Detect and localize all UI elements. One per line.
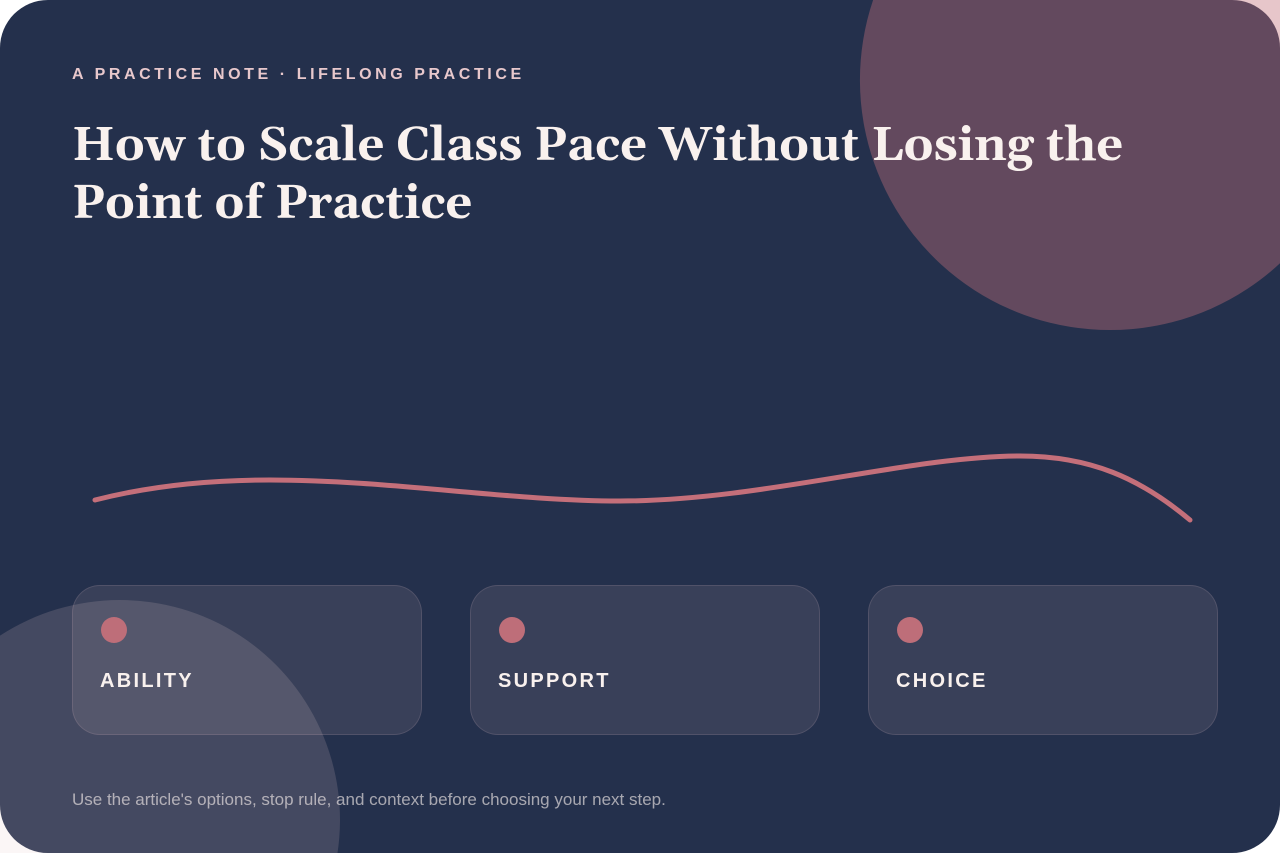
label: ability: ABILITY — [100, 670, 194, 692]
decorative circle: bottom left — [0, 600, 340, 853]
card: choice — [868, 585, 1218, 735]
decorative circle: top right — [860, 0, 1280, 330]
title: How to Scale Class Pace Without Losing the Point of Practice — [72, 117, 1123, 235]
card: support — [470, 585, 820, 735]
label: support: SUPPORT — [498, 670, 611, 692]
icon: ability dot — [101, 617, 127, 643]
card: ability — [72, 585, 422, 735]
wavy line — [92, 454, 1192, 522]
icon: choice dot — [897, 617, 923, 643]
label: choice: CHOICE — [896, 670, 988, 692]
footer note: Use the article's options, stop rule, and context before choosing your next step. — [72, 790, 666, 809]
icon: support dot — [499, 617, 525, 643]
eyebrow: A PRACTICE NOTE · LIFELONG PRACTICE — [72, 66, 525, 83]
